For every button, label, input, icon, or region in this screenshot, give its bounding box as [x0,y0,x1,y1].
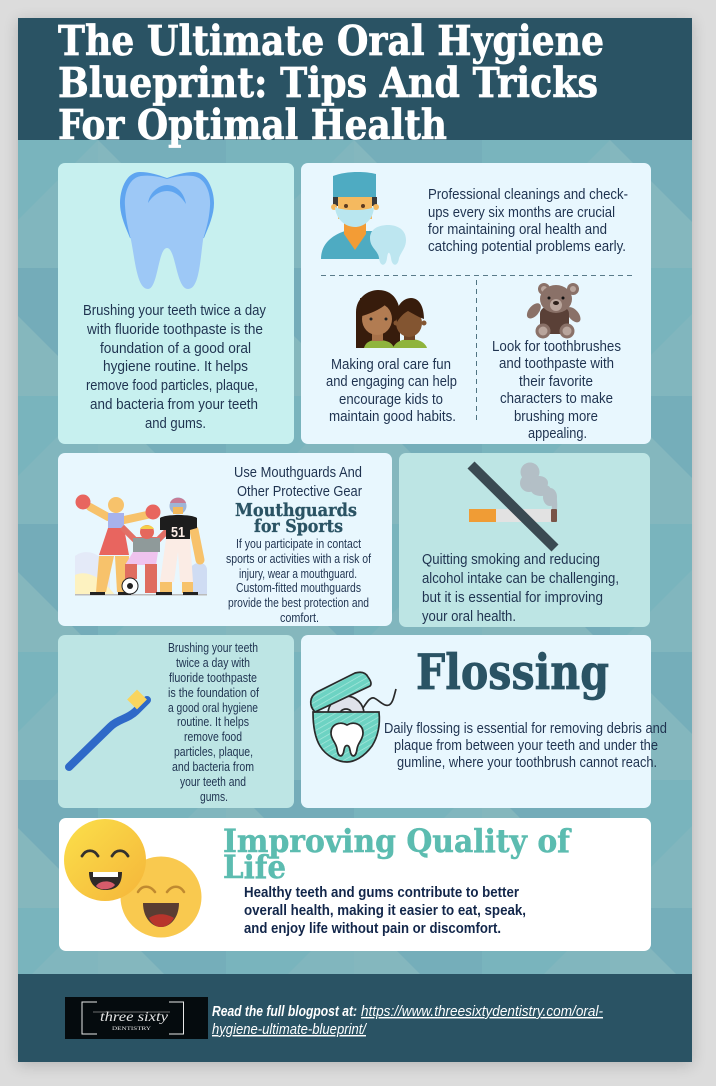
text: favorite characters: and toothpaste with [499,355,614,372]
text: favorite characters: appealing. [528,425,587,442]
text: daily flossing: plaque from between your teeth and under the [394,737,658,754]
title: The Ultimate Oral Hygiene [58,17,604,65]
heading: flossing: Flossing [416,643,609,701]
text: brushing: and bacteria from your teeth [90,396,258,413]
text: healthy teeth: overall health, making it easier to eat, speak, [244,902,526,919]
icon: floss box [311,672,396,762]
text: quitting smoking: your oral health. [422,608,516,625]
text: brushing twice: Brushing your teeth [168,640,258,655]
heading: improving quality of life: Improving Quality of [223,822,572,860]
heading: mouthguards for sports [235,500,357,537]
panel: flossing [301,635,667,808]
text: making oral care fun: and engaging can help [326,373,457,390]
text: favorite characters [492,338,621,442]
text: quitting smoking [422,551,619,625]
text: protective gear [234,464,362,500]
text: brushing twice: routine. It helps [177,714,249,729]
background panel [18,140,692,974]
text: daily flossing: gumline, where your toothbrush cannot reach. [397,754,657,771]
heading: mouthguards for sports: for Sports [254,516,343,537]
icon: toothbrush [69,690,147,767]
text: cleanings: for maintaining oral health and [428,221,607,238]
title [58,17,604,149]
text: protective gear: Other Protective Gear [237,483,362,500]
text: quitting smoking: but it is essential for improving [422,589,603,606]
text: cleanings: Professional cleanings and check- [428,186,628,203]
text: mouthguard advice [226,536,371,625]
text: brushing twice: twice a day with [176,655,250,670]
icon: no smoking [469,462,557,548]
title: For Optimal Health [58,101,447,149]
icon: teddy bear [524,283,583,338]
title: Blueprint: Tips And Tricks [58,59,598,107]
text: daily flossing: Daily flossing is essential for removing debris and [384,720,667,737]
football player: 51 [171,524,185,541]
text: brushing twice: remove food [184,729,242,744]
text: mouthguard advice: comfort. [280,610,319,625]
text: read the full blogpost: Read the full blogpost at: [212,1004,357,1020]
text: making oral care fun: maintain good habits. [329,408,456,425]
text: read the full blogpost [212,1004,603,1038]
text: favorite characters: brushing more [514,408,598,425]
text: mouthguard advice: provide the best protection and [228,595,369,610]
heading: improving quality of life [223,822,572,886]
text: brushing [83,302,266,432]
text: cleanings: catching potential problems early. [428,238,626,255]
text: healthy teeth [244,884,526,937]
text: making oral care fun: Making oral care fun [331,356,451,373]
logo: three sixty dentistry [65,997,208,1039]
panel: brushing [58,163,294,444]
text: mouthguard advice: injury, wear a mouthguard. [239,566,357,581]
text: brushing twice [168,640,259,804]
text: read the full blogpost: https://www.threesixtydentistry.com/oral- [361,1004,603,1020]
text: brushing twice: gums. [200,789,228,804]
text: daily flossing [384,720,667,771]
text: brushing twice: and bacteria from [172,759,254,774]
text: brushing: and gums. [145,415,206,432]
text: brushing: hygiene routine. It helps [103,358,248,375]
text: favorite characters: their favorite [519,373,593,390]
text: brushing: remove food particles, plaque, [86,377,258,394]
text: brushing: with fluoride toothpaste is the [86,321,263,338]
text: mouthguard advice: If you participate in contact [236,536,361,551]
icon: tooth [120,172,214,289]
panel: toothbrush [58,635,294,808]
text: making oral care fun [326,356,457,425]
panel: quitting smoking [399,453,650,627]
text: healthy teeth: Healthy teeth and gums contribute to better [244,884,519,901]
text: cleanings [428,186,628,255]
child player [122,525,171,594]
icon: parent and child [356,290,427,348]
text: favorite characters: Look for toothbrushes [492,338,621,355]
text: cleanings: ups every six months are crucial [428,204,615,221]
text: brushing twice: a good oral hygiene [168,700,258,715]
panel: professional care and kids [301,163,651,444]
text: making oral care fun: encourage kids to [339,391,443,408]
panel: quality of life [59,818,651,951]
text: brushing twice: is the foundation of [168,685,259,700]
text: read the full blogpost: hygiene-ultimate-blueprint/ [212,1022,368,1038]
left boxer [76,494,160,595]
text: brushing: Brushing your teeth twice a day [83,302,266,319]
footer band [18,974,692,1062]
text: mouthguard advice: sports or activities with a risk of [226,551,371,566]
text: quitting smoking: alcohol intake can be challenging, [422,570,619,587]
text: brushing: foundation of a good oral [100,340,251,357]
text: favorite characters: characters to make [500,390,613,407]
text: protective gear: Use Mouthguards And [234,464,362,481]
panel: mouthguards [58,453,392,626]
heading: mouthguards for sports: Mouthguards [235,500,357,521]
text: quitting smoking: Quitting smoking and reducing [422,551,600,568]
icon: dentist [321,172,406,265]
logo: three sixty dentistry: DENTISTRY [112,1026,151,1032]
text: brushing twice: your teeth and [180,774,246,789]
header band [18,18,692,140]
logo: three sixty dentistry: three sixty [100,1010,169,1025]
text: mouthguard advice: Custom-fitted mouthguards [236,580,361,595]
text: brushing twice: fluoride toothpaste [169,670,257,685]
heading: improving quality of life: Life [223,848,286,886]
text: brushing twice: particles, plaque, [174,744,253,759]
icon: laughing emoji back [120,856,202,938]
illustration: athletes [75,494,207,596]
text: healthy teeth: and enjoy life without pain or discomfort. [244,920,501,937]
icon: laughing emoji front [64,819,146,901]
